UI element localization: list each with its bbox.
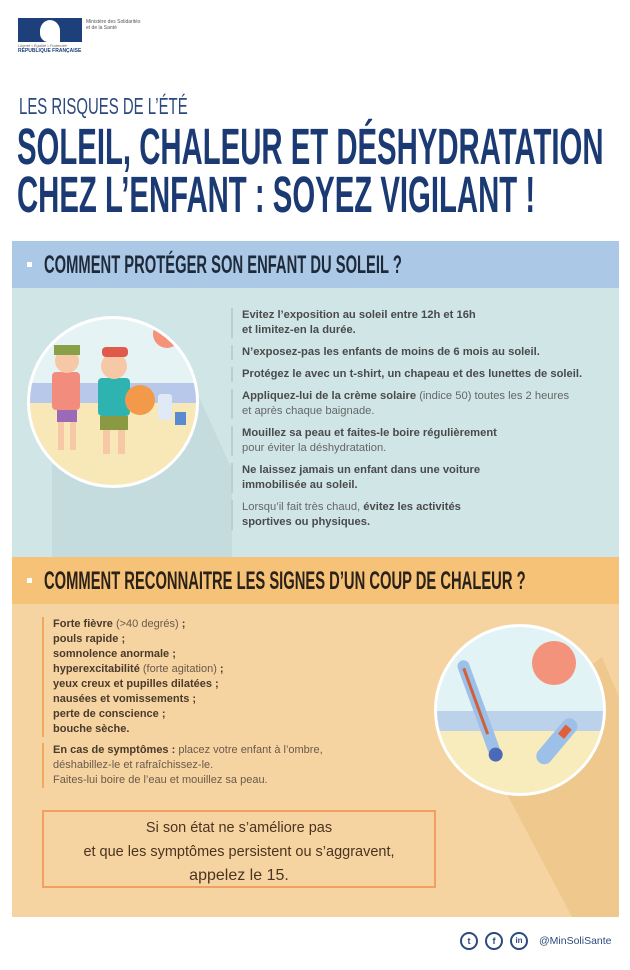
footer: social icons: in <box>515 936 523 945</box>
text block: protection tips: Ne laissez jamais un enfant dans une voiture <box>242 464 480 476</box>
footer: social icons: f <box>492 936 496 946</box>
footer: social icons <box>460 932 612 950</box>
text block: symptoms: bouche sèche. <box>53 723 129 735</box>
footer: social icons: t <box>468 936 470 946</box>
title: CHEZ L’ENFANT : SOYEZ VIGILANT ! <box>17 166 535 223</box>
footer: social icons: @MinSoliSante <box>539 935 612 947</box>
title: SOLEIL, CHALEUR ET DÉSHYDRATATION <box>17 118 604 175</box>
callout: call 15: Si son état ne s’améliore pas <box>146 820 332 836</box>
text block: protection tips: Appliquez-lui de la crème solaire (indice 50) toutes les 2 heures <box>242 390 569 402</box>
text block: symptoms: somnolence anormale ; <box>53 648 176 660</box>
title <box>17 118 604 223</box>
text block: protection tips: Lorsqu’il fait très chaud, évitez les activités <box>242 501 461 513</box>
callout: call 15: et que les symptômes persistent ou s’aggravent, <box>83 844 395 860</box>
text block: symptoms: déshabillez-le et rafraîchissez-le. <box>53 759 213 771</box>
text block: protection tips: Evitez l’exposition au soleil entre 12h et 16h <box>242 309 476 321</box>
text block: protection tips: sportives ou physiques. <box>242 516 370 528</box>
text block: symptoms: Forte fièvre (>40 degrés) ; <box>53 618 185 630</box>
logo: république française <box>18 18 140 54</box>
callout: call 15 <box>42 810 436 888</box>
illustration: children at beach <box>27 316 232 557</box>
text block: symptoms: Faites-lui boire de l’eau et mouillez sa peau. <box>53 774 268 786</box>
heading: protect <box>12 241 619 288</box>
panel: protect from sun <box>12 241 619 557</box>
text block: symptoms: yeux creux et pupilles dilatées ; <box>53 678 219 690</box>
text block: symptoms: hyperexcitabilité (forte agitation) ; <box>53 663 224 675</box>
text block: protection tips: et après chaque baignade. <box>242 405 374 417</box>
text block: protection tips: Mouillez sa peau et faites-le boire régulièrement <box>242 427 497 439</box>
text block: symptoms: nausées et vomissements ; <box>53 693 196 705</box>
panel: heat stroke signs <box>12 557 619 917</box>
text block: symptoms: En cas de symptômes : placez votre enfant à l’ombre, <box>53 744 323 756</box>
text block: protection tips: pour éviter la déshydratation. <box>242 442 386 454</box>
text block: protection tips: et limitez-en la durée. <box>242 324 356 336</box>
heading: heat stroke <box>12 557 619 604</box>
callout: call 15: appelez le 15. <box>189 867 289 884</box>
text block: symptoms: perte de conscience ; <box>53 708 166 720</box>
logo: république française: et de la Santé <box>86 25 117 31</box>
text block: protection tips: N’exposez-pas les enfants de moins de 6 mois au soleil. <box>242 346 540 358</box>
illustration: thermometers <box>434 624 619 917</box>
text block: protection tips: Protégez le avec un t-shirt, un chapeau et des lunettes de soleil. <box>242 368 582 380</box>
subtitle: LES RISQUES DE L’ÉTÉ <box>19 93 188 119</box>
text block: symptoms: pouls rapide ; <box>53 633 125 645</box>
logo: république française: Ministère des Solidarités <box>86 19 140 25</box>
heading: heat stroke: COMMENT RECONNAITRE LES SIGNES D’UN COUP DE CHALEUR ? <box>44 567 526 595</box>
logo: république française: Liberté • Égalité • Fraternité <box>18 43 67 48</box>
text block: symptoms <box>42 617 323 788</box>
text block: protection tips: immobilisée au soleil. <box>242 479 358 491</box>
logo: république française: RÉPUBLIQUE FRANÇAISE <box>18 48 81 54</box>
heading: protect: COMMENT PROTÉGER SON ENFANT DU SOLEIL ? <box>44 251 402 279</box>
text block: protection tips <box>231 308 582 530</box>
